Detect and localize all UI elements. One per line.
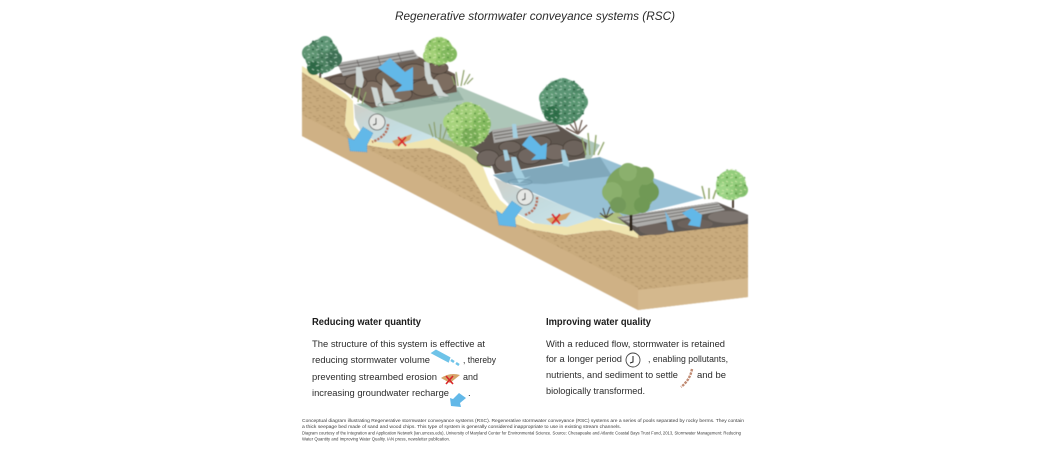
body text: preventing streambed erosion [312, 372, 437, 383]
small shrub [600, 207, 613, 218]
clock 1 [369, 114, 385, 130]
body text: The structure of this system is effective at [312, 339, 485, 350]
diagram: stream block [302, 36, 748, 310]
caption: Conceptual diagram illustrating Regenerative stormwater conveyance systems (RSC). Regenerative stormwater conveyance (RSC) systems are a series of pools separated by rocky berms. They contain [302, 418, 744, 423]
panel: reducing water quantity [312, 317, 496, 407]
chain 2 [525, 197, 537, 215]
heading: Reducing water quantity [312, 317, 421, 328]
body text: increasing groundwater recharge [312, 388, 449, 399]
sand layer [302, 66, 638, 238]
rock berm 1 [323, 50, 457, 108]
tree light 2 [423, 36, 457, 67]
icon: stormwater arrow [433, 351, 459, 365]
erosion mark 1 [392, 134, 412, 146]
clock 2 [517, 189, 533, 205]
tree light 6 [715, 169, 748, 208]
erosion mark 2 [546, 212, 571, 224]
caption: a thick seepage bed made of sand and wood chips. This type of system is generally considered inappropriate to use in existing stream channels. [302, 424, 621, 429]
upstream wedge of pool 1 [354, 104, 447, 145]
body text: biologically transformed. [546, 386, 645, 397]
caption [302, 418, 744, 442]
body text: nutrients, and sediment to settle [546, 370, 678, 381]
pool 1 dark reflection [358, 90, 464, 112]
chain 1 [372, 124, 388, 142]
soil cross-section [302, 70, 638, 310]
title: Regenerative stormwater conveyance systems (RSC) [395, 9, 675, 23]
green bank [436, 137, 492, 168]
green bank near outlet [598, 212, 638, 228]
pool 1 surface [356, 87, 600, 160]
body text: and [463, 372, 478, 383]
body text: for a longer period [546, 354, 622, 365]
soil side face [638, 223, 748, 310]
panel: improving water quality [546, 317, 728, 397]
body text [312, 339, 496, 399]
reeds 2 [429, 122, 447, 139]
soil lower band [302, 115, 638, 310]
body text: and be [697, 370, 726, 381]
rock berm 2 [470, 120, 587, 185]
rock berm 3 [617, 202, 748, 236]
icon: clock [626, 353, 640, 367]
reeds 1 [352, 70, 473, 104]
arrow: flow over berm 3 [682, 208, 702, 227]
body text: With a reduced flow, stormwater is retained [546, 339, 725, 350]
icon: recharge arrow [450, 393, 466, 407]
body text: reducing stormwater volume [312, 355, 430, 366]
reeds 3 [702, 186, 716, 199]
body text: , enabling pollutants, [648, 354, 728, 365]
tree dark 1 [302, 36, 342, 78]
shrub and reeds [566, 120, 604, 155]
icon: erosion [441, 374, 460, 384]
heading: Improving water quality [546, 317, 651, 328]
body text [546, 339, 728, 397]
soil side lower band [638, 278, 748, 310]
body text: , thereby [463, 355, 496, 366]
arrow: infiltration 1 [348, 127, 373, 152]
arrow: flow over berm 2 [522, 135, 547, 160]
pool 2 surface [493, 157, 704, 219]
upstream wedge of pool 2 [494, 178, 596, 229]
caption: Diagram courtesy of the Integration and Application Network (ian.umces.edu), University of Maryland Center for Environmental Science. Source: Chesapeake and Atlantic Coastal Bays Trust Fund, 2013, Stormwater Management: Reducing [302, 430, 741, 436]
tree mid 5 [602, 163, 659, 231]
body text: . [468, 388, 471, 399]
pool 2 dark reflection [493, 157, 612, 184]
icon: sediment chain [681, 369, 692, 387]
tree light 3 [443, 102, 491, 148]
caption: Water Quantity and Improving Water Quality. IAN press, newsletter publication. [302, 436, 450, 442]
arrow: flow over berm 1 [378, 58, 413, 92]
arrow: infiltration 2 [496, 201, 522, 227]
tree dark 4 [539, 78, 588, 126]
